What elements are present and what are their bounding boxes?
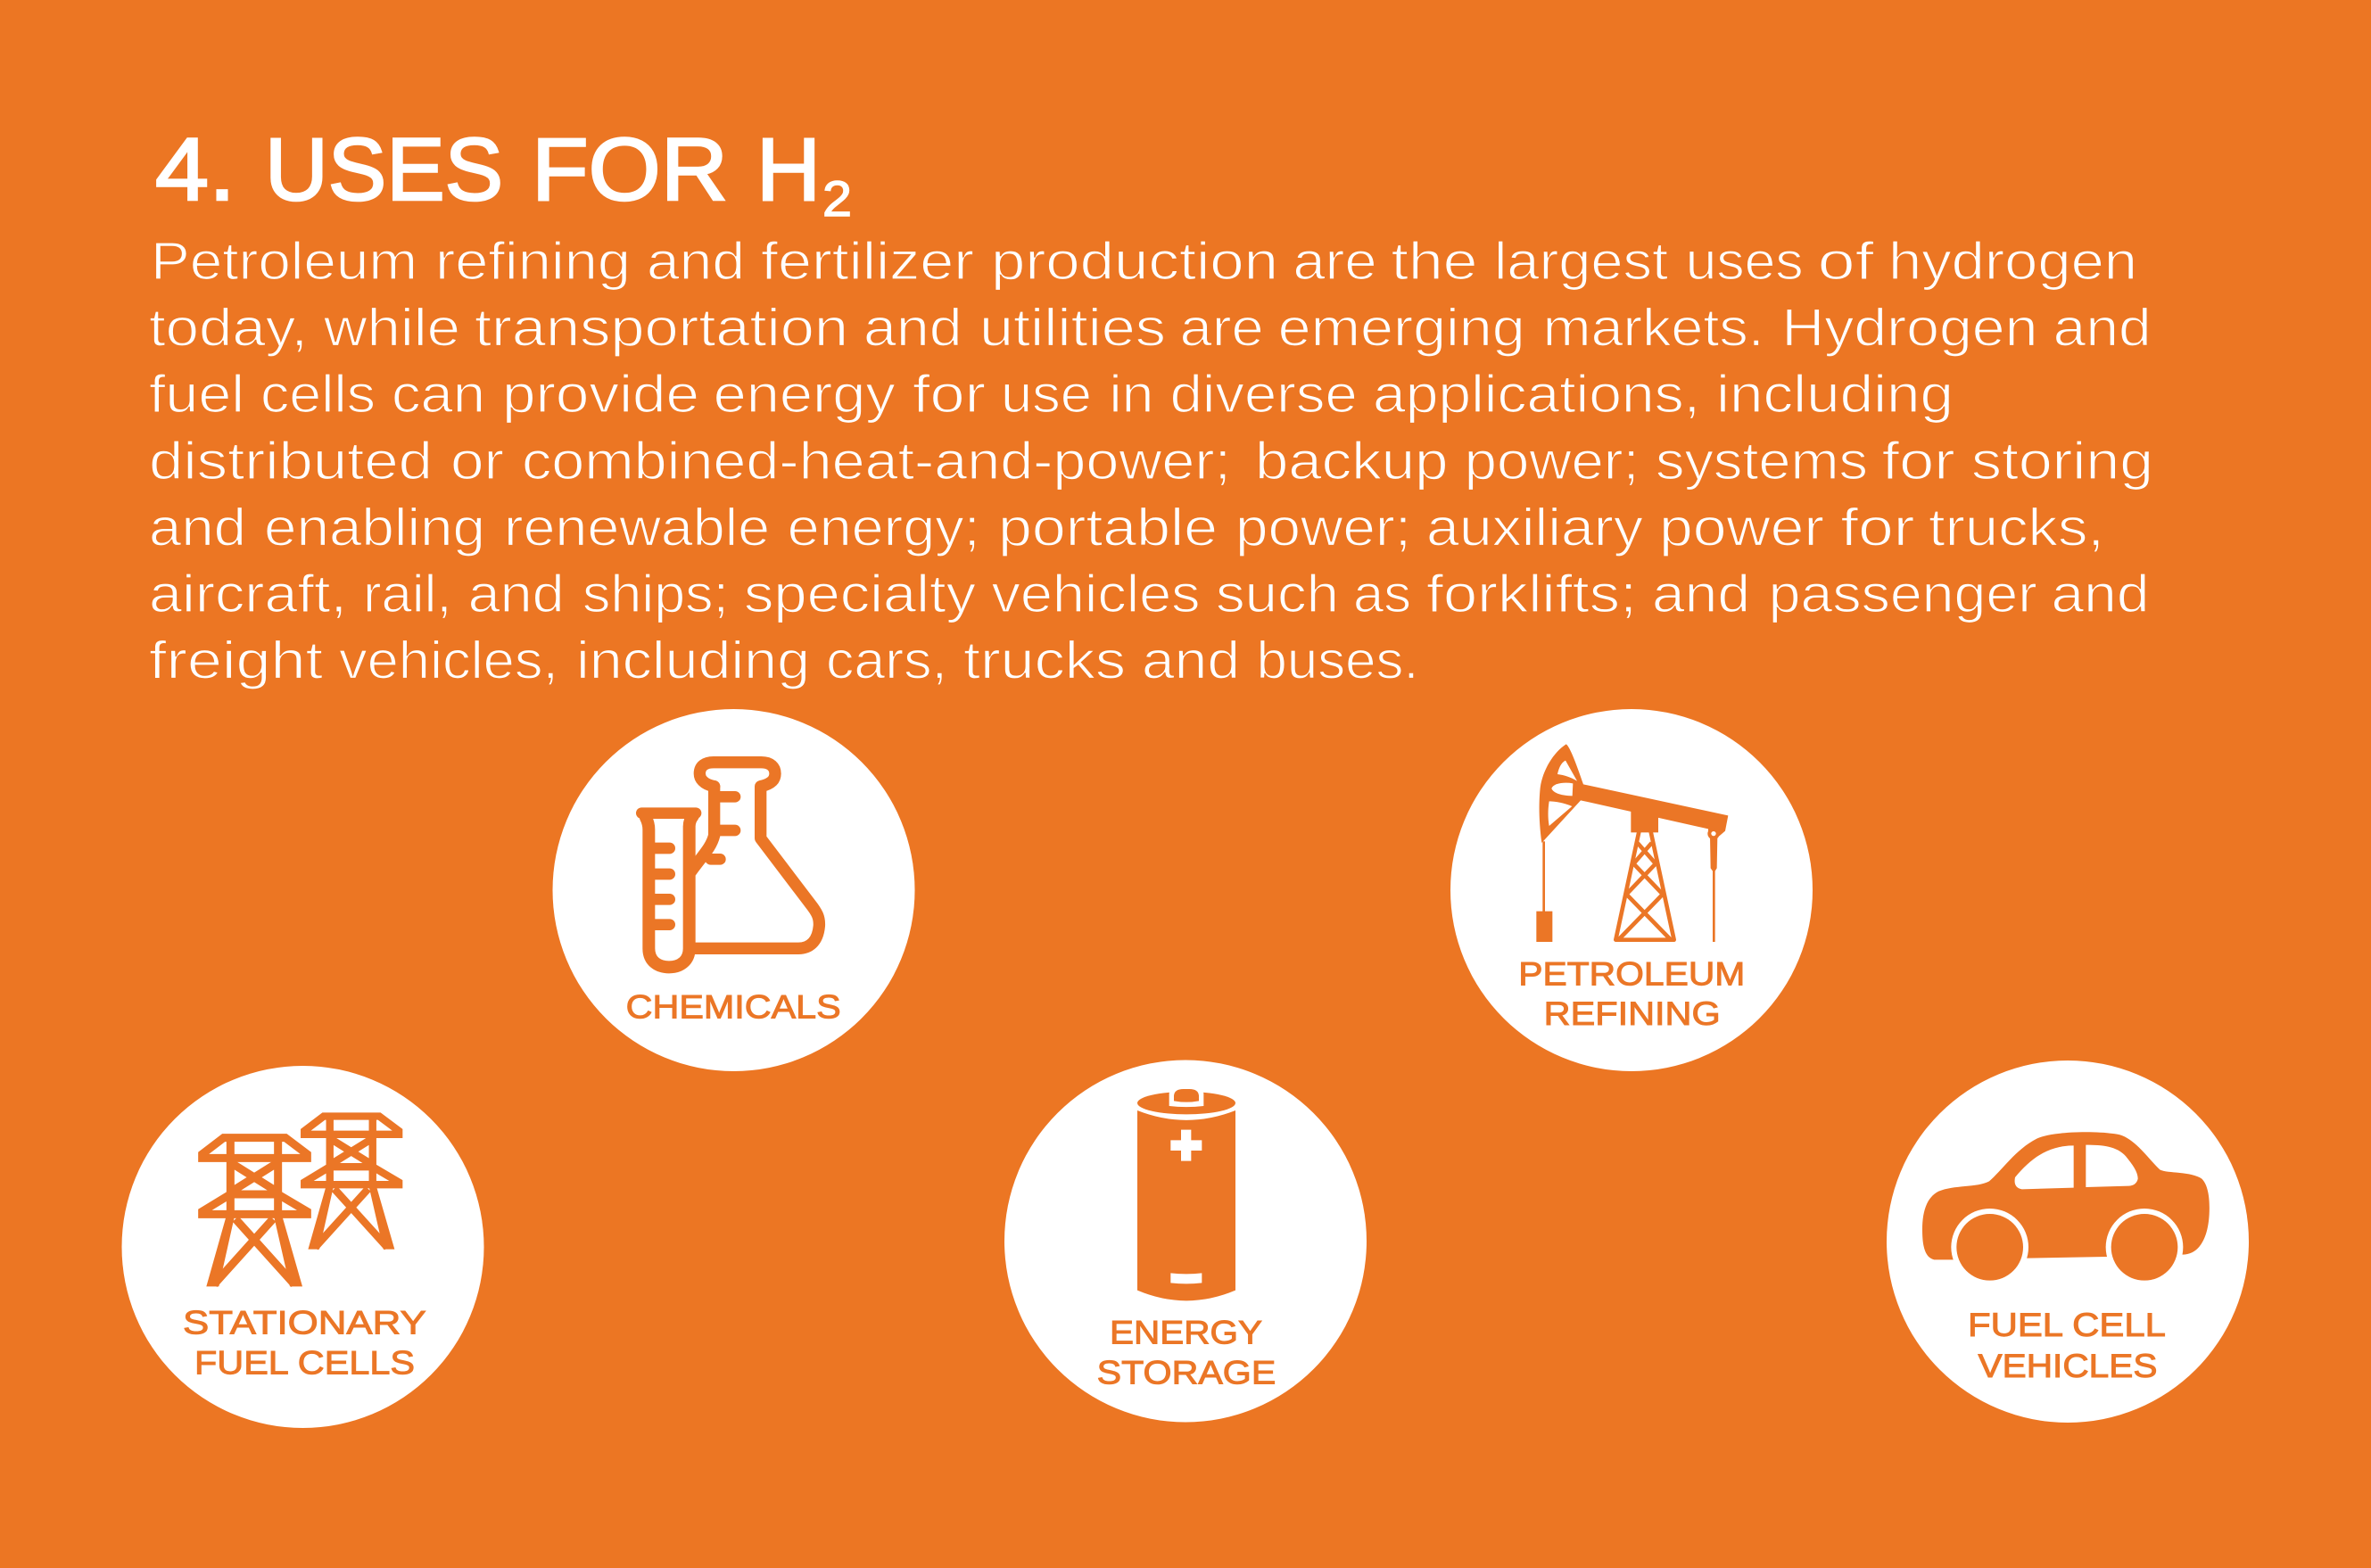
- body text block: trucks,: [1929, 498, 2104, 557]
- label: fuel cell vehicles: FUEL CELL: [1968, 1306, 2166, 1343]
- label: fuel cell vehicles: VEHICLES: [1979, 1347, 2157, 1384]
- body text block: storing: [1971, 432, 2153, 491]
- body text block: cars,: [826, 631, 947, 690]
- icon: oil pump jack: [1536, 744, 1728, 942]
- body text block: aircraft,: [149, 565, 347, 623]
- icon: flask and test tube: [641, 763, 819, 967]
- body text block: emerging: [1278, 299, 1525, 358]
- body text block: combined-heat-and-power;: [522, 432, 1231, 491]
- body text block: Hydrogen: [1781, 299, 2037, 358]
- body text block: for: [1840, 498, 1914, 557]
- body text block: transportation: [475, 299, 848, 358]
- body text block: freight: [149, 631, 323, 690]
- body text block: power: [1659, 498, 1824, 557]
- body text block: in: [1109, 365, 1153, 424]
- label: chemicals: CHEMICALS: [626, 988, 841, 1026]
- body text block: for: [913, 365, 986, 424]
- body text block: forklifts;: [1426, 565, 1637, 623]
- body text block: buses.: [1256, 631, 1418, 690]
- body text block: markets.: [1543, 299, 1764, 358]
- label: stationary fuel cells: [183, 1304, 426, 1382]
- body text block: and: [1142, 631, 1240, 690]
- title: H: [756, 120, 821, 219]
- body text block: systems: [1656, 432, 1868, 491]
- title: FOR: [532, 120, 728, 219]
- body text block: largest: [1494, 232, 1668, 291]
- body text block: and: [2053, 299, 2152, 358]
- body text block: hydrogen: [1888, 232, 2137, 291]
- title: 2: [822, 170, 852, 227]
- body text block: enabling: [264, 498, 485, 557]
- body text block: auxiliary: [1426, 498, 1644, 557]
- body text block: utilities: [979, 299, 1166, 358]
- body text block: specialty: [744, 565, 977, 623]
- body text block: production: [991, 232, 1278, 291]
- body text block: and: [863, 299, 962, 358]
- body text block: ships;: [582, 565, 729, 623]
- panel: energy storage: [1004, 1060, 1367, 1422]
- panel: fuel cell vehicles: [1887, 1060, 2249, 1423]
- body text block: power;: [1465, 432, 1640, 491]
- body text block: backup: [1255, 432, 1449, 491]
- body text block: cells: [260, 365, 376, 424]
- body text block: power;: [1235, 498, 1411, 557]
- title: USES: [265, 120, 503, 219]
- body text block: are: [1180, 299, 1264, 358]
- panel: petroleum refining: [1450, 709, 1813, 1071]
- body text block: vehicles,: [339, 631, 558, 690]
- body text block: [149, 232, 2153, 690]
- body text block: fuel: [149, 365, 244, 424]
- body text block: and: [2052, 565, 2150, 623]
- panel: stationary fuel cells: [121, 1066, 483, 1428]
- body text block: including: [576, 631, 810, 690]
- body text block: renewable: [504, 498, 770, 557]
- body text block: including: [1716, 365, 1954, 424]
- body text block: energy;: [788, 498, 980, 557]
- body text block: and: [647, 232, 745, 291]
- body text block: today,: [149, 299, 308, 358]
- body text block: can: [392, 365, 485, 424]
- title: 4.: [155, 120, 235, 219]
- body text block: or: [450, 432, 504, 491]
- label: stationary fuel cells: FUEL CELLS: [194, 1344, 415, 1382]
- body text block: rail,: [363, 565, 451, 623]
- label: petroleum refining: PETROLEUM: [1518, 954, 1745, 992]
- body text block: and: [149, 498, 246, 557]
- body text block: distributed: [149, 432, 433, 491]
- panel: chemicals: [553, 709, 915, 1071]
- title: [155, 120, 852, 227]
- body text block: portable: [998, 498, 1218, 557]
- body text block: passenger: [1769, 565, 2037, 623]
- body text block: provide: [502, 365, 699, 424]
- body text block: trucks: [963, 631, 1126, 690]
- icon: car: [1922, 1132, 2210, 1286]
- body text block: as: [1353, 565, 1411, 623]
- body text block: while: [323, 299, 460, 358]
- body text block: for: [1882, 432, 1955, 491]
- label: energy storage: STORAGE: [1097, 1354, 1276, 1391]
- body text block: use: [1001, 365, 1092, 424]
- label: energy storage: ENERGY: [1110, 1314, 1262, 1351]
- label: petroleum refining: REFINING: [1544, 994, 1721, 1032]
- label: petroleum refining: [1518, 954, 1745, 1032]
- icon: transmission towers: [202, 1117, 399, 1286]
- body text block: Petroleum: [151, 232, 417, 291]
- label: fuel cell vehicles: [1968, 1306, 2166, 1384]
- body text block: and: [1652, 565, 1750, 623]
- body text block: are: [1293, 232, 1377, 291]
- body text block: uses: [1686, 232, 1804, 291]
- body text block: and: [468, 565, 565, 623]
- label: energy storage: [1097, 1314, 1276, 1391]
- icon: battery: [1137, 1088, 1235, 1300]
- body text block: such: [1216, 565, 1339, 623]
- body text block: diverse: [1170, 365, 1358, 424]
- body text block: of: [1818, 232, 1874, 291]
- body text block: energy: [714, 365, 896, 424]
- body text block: vehicles: [992, 565, 1201, 623]
- body text block: applications,: [1373, 365, 1700, 424]
- body text block: fertilizer: [761, 232, 974, 291]
- body text block: the: [1392, 232, 1477, 291]
- label: stationary fuel cells: STATIONARY: [183, 1304, 426, 1341]
- body text block: refining: [435, 232, 631, 291]
